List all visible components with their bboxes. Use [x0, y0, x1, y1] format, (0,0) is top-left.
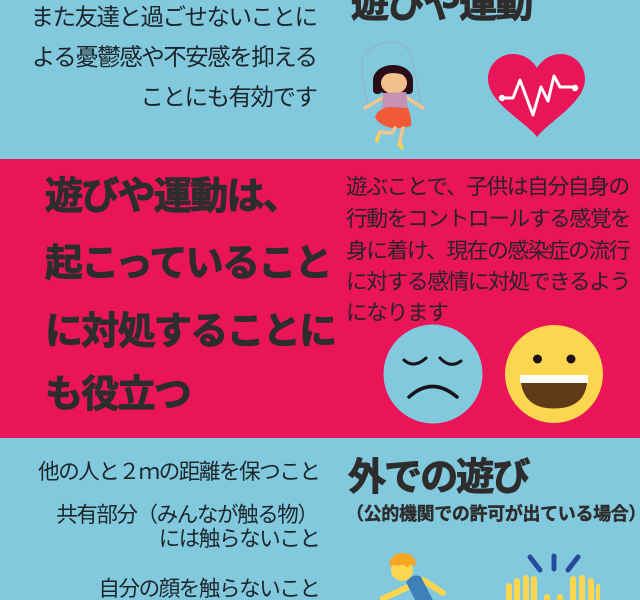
heading: play helps with what is happening: 起こっていること	[45, 232, 331, 287]
text block: outdoor rules: 他の人と２ｍの距離を保つこと	[38, 455, 320, 486]
heading: play helps with what is happening	[44, 165, 335, 418]
heading: play helps with what is happening: に対処することに	[45, 300, 335, 355]
heading: outdoor play: 外での遊び	[348, 446, 529, 501]
icon: laughing face	[505, 325, 603, 423]
icon: girl jumping rope	[361, 42, 425, 150]
icon: sad face	[384, 324, 482, 424]
text block: play and emotional control: 行動をコントロールする感覚を	[346, 202, 630, 233]
text block: top advice: ことにも有効です	[140, 78, 316, 112]
text block: outdoor rules: 共有部分（みんなが触る物）	[56, 498, 318, 529]
icon: running child	[380, 553, 446, 600]
text block: top advice	[30, 0, 316, 112]
text block: top advice: よる憂鬱感や不安感を抑える	[32, 38, 316, 72]
text block: play and emotional control: 身に着け、現在の感染症の流行	[346, 234, 629, 265]
heading: play helps with what is happening: も役立つ	[45, 363, 190, 418]
text block: outdoor rules	[38, 455, 320, 600]
text block: play and emotional control: に対する感情に対処できるよう	[346, 265, 630, 296]
panel: red band	[0, 159, 640, 438]
text block: play and emotional control: になります	[346, 296, 448, 327]
text block: play and emotional control: 遊ぶことで、子供は自分自身の	[346, 170, 629, 201]
text block: outdoor rules: には触らないこと	[159, 522, 320, 553]
icon: heart with pulse line	[488, 54, 585, 137]
text block: play and emotional control	[346, 170, 630, 327]
heading: play helps with what is happening: 遊びや運動は、	[45, 165, 299, 220]
subtitle: if permitted by authorities: （公的機関での許可が出ている場合）	[346, 500, 640, 526]
icon: high five hands	[506, 554, 600, 600]
